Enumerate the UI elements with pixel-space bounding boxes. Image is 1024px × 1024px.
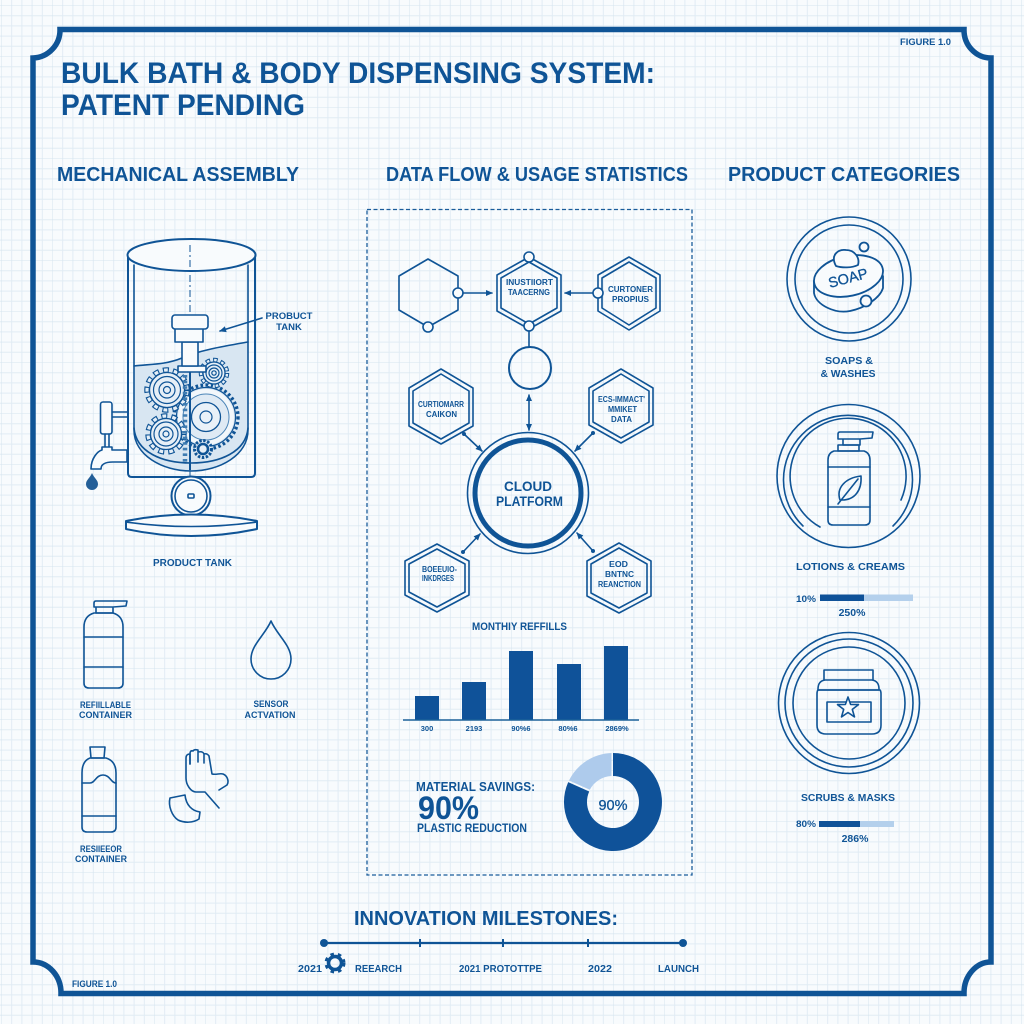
label: reservoir container: RESIIEEOR bbox=[80, 844, 122, 854]
diagonal arrows bbox=[461, 431, 595, 554]
bar chart: 90%6 bbox=[511, 724, 531, 733]
icon: refillable pump bottle bbox=[84, 601, 127, 688]
icon: lotion bottle bbox=[777, 404, 920, 548]
heading: INNOVATION MILESTONES: bbox=[354, 908, 618, 930]
figure label top: FIGURE 1.0 bbox=[900, 37, 951, 47]
tank liquid bbox=[134, 342, 248, 471]
hexagon: industry tracking: INUSTIIORT bbox=[506, 278, 553, 287]
timeline labels: 2021 PROTOTTPE bbox=[459, 964, 542, 975]
hexagon: industry tracking bbox=[497, 252, 561, 331]
gear upper right bbox=[201, 360, 227, 386]
icon: drop bbox=[251, 621, 291, 679]
cloud platform: CLOUD bbox=[504, 479, 552, 494]
bar chart: 2193 bbox=[466, 724, 482, 733]
label: reservoir container bbox=[75, 844, 127, 864]
dashed panel bbox=[367, 210, 692, 875]
stat: material savings: 90% bbox=[418, 790, 479, 826]
hexagon: bottom right: EOD bbox=[609, 560, 628, 569]
tank body bbox=[128, 255, 255, 477]
base bbox=[126, 514, 257, 536]
hexagon: customer caution bbox=[409, 369, 473, 444]
arrow bbox=[463, 292, 492, 294]
icon: soap bbox=[787, 217, 911, 341]
stat: material savings bbox=[416, 780, 535, 835]
bar chart: 300 bbox=[421, 724, 433, 733]
progress: lotions bbox=[796, 594, 913, 619]
hexagon: bottom right bbox=[587, 543, 651, 613]
timeline labels: 2022 bbox=[588, 964, 612, 975]
figure label bottom: FIGURE 1.0 bbox=[72, 979, 117, 989]
timeline labels: LAUNCH bbox=[658, 964, 699, 975]
icon: reservoir bottle bbox=[82, 747, 116, 832]
bar chart bbox=[403, 646, 639, 733]
small gear bbox=[194, 440, 212, 458]
hexagon: customer caution: CAIKON bbox=[426, 410, 457, 419]
diagram: product tank bbox=[86, 239, 257, 536]
label: sensor activation: ACTVATION bbox=[244, 710, 296, 720]
centre line bbox=[189, 245, 191, 525]
shaft bearings bbox=[183, 375, 187, 462]
hexagon: bottom right: REANCTION bbox=[598, 580, 641, 589]
progress: lotions: 250% bbox=[839, 607, 866, 619]
hexagon: customer profiles: CURTONER bbox=[608, 285, 653, 294]
label: sensor activation bbox=[244, 699, 296, 720]
label: refillable container: CONTAINER bbox=[79, 710, 132, 720]
connector bbox=[528, 331, 530, 347]
donut chart: 90% bbox=[598, 798, 628, 814]
progress: scrubs: 80% bbox=[796, 819, 817, 830]
callout: product tank bbox=[266, 311, 313, 333]
timeline bbox=[320, 939, 687, 947]
cloud platform bbox=[468, 432, 588, 554]
timeline labels: REEARCH bbox=[355, 964, 402, 975]
panel: product categories bbox=[777, 217, 920, 845]
gear upper left bbox=[147, 370, 187, 410]
hexagon: customer profiles bbox=[593, 257, 660, 330]
bar chart: 2869% bbox=[605, 724, 629, 733]
label: scrubs and masks: SCRUBS & MASKS bbox=[801, 792, 895, 804]
label: refillable container: REFIILLABLE bbox=[80, 700, 131, 710]
shaft and cap bbox=[178, 366, 206, 372]
arrow bbox=[565, 292, 593, 294]
hexagon: customer profiles: PROPIUS bbox=[612, 295, 650, 304]
bar chart: 80%6 bbox=[558, 724, 578, 733]
hexagon: bottom right: BNTNC bbox=[605, 570, 634, 579]
chart title: MONTHIY REFFILLS bbox=[472, 621, 567, 633]
label: soaps and washes bbox=[820, 355, 876, 380]
heading: product categories: PRODUCT CATEGORIES bbox=[728, 164, 960, 186]
arrow bbox=[528, 395, 530, 430]
network diagram bbox=[399, 252, 660, 613]
hexagon: eco-impact data bbox=[589, 369, 653, 443]
panel: data flow and usage statistics bbox=[367, 210, 692, 875]
heading: data flow: DATA FLOW & USAGE STATISTICS bbox=[386, 164, 688, 186]
gear icon bbox=[326, 954, 344, 972]
timeline labels: 2021 bbox=[298, 964, 322, 975]
callout arrow bbox=[220, 318, 262, 331]
label: soaps and washes: & WASHES bbox=[820, 368, 876, 380]
progress: scrubs bbox=[796, 819, 894, 845]
callout: product tank: PROBUCT bbox=[266, 311, 313, 322]
label: refillable container bbox=[79, 700, 132, 720]
icon: hand sensor bbox=[169, 750, 228, 822]
heading: mechanical assembly: MECHANICAL ASSEMBLY bbox=[57, 164, 300, 186]
large chain gear bbox=[174, 385, 238, 449]
title: PATENT PENDING bbox=[61, 89, 305, 122]
label: lotions and creams: LOTIONS & CREAMS bbox=[796, 561, 905, 573]
icon: soap: SOAP bbox=[827, 266, 870, 292]
hexagon: eco-impact data: MMIKET bbox=[608, 405, 637, 414]
label: reservoir container: CONTAINER bbox=[75, 854, 127, 864]
hexagon: bottom left: INKDRGES bbox=[422, 574, 454, 583]
hexagon: eco-impact data: DATA bbox=[611, 415, 632, 424]
title: BULK BATH & BODY DISPENSING SYSTEM: bbox=[61, 57, 655, 90]
wheel bbox=[172, 476, 210, 516]
node circle bbox=[509, 347, 551, 389]
stat: material savings: MATERIAL SAVINGS: bbox=[416, 780, 535, 794]
donut chart bbox=[564, 753, 662, 851]
callout: product tank: TANK bbox=[276, 322, 302, 333]
panel: innovation milestones bbox=[298, 908, 699, 975]
gear lower left bbox=[148, 416, 184, 452]
drop bbox=[86, 473, 98, 490]
progress: scrubs: 286% bbox=[842, 833, 869, 845]
hexagon: customer caution: CURTIOMARR bbox=[418, 400, 464, 409]
cloud platform: PLATFORM bbox=[496, 494, 563, 509]
caption: product tank: PRODUCT TANK bbox=[153, 557, 232, 569]
title bbox=[61, 57, 655, 122]
hexagon: bottom left: BOEEUIO- bbox=[422, 565, 457, 574]
gears bbox=[147, 360, 238, 462]
stat: material savings: PLASTIC REDUCTION bbox=[417, 823, 527, 835]
hexagon: bottom left bbox=[405, 544, 469, 612]
timeline labels bbox=[298, 964, 699, 975]
label: sensor activation: SENSOR bbox=[254, 699, 289, 709]
hexagon: eco-impact data: ECS-IMMACT' bbox=[598, 395, 645, 404]
panel: mechanical assembly bbox=[75, 239, 313, 864]
label: soaps and washes: SOAPS & bbox=[825, 355, 873, 367]
progress: lotions: 10% bbox=[796, 594, 817, 605]
icon: scrub jar bbox=[778, 632, 920, 774]
hexagon: blank bbox=[399, 259, 463, 332]
tap bbox=[112, 412, 127, 417]
hexagon: industry tracking: TAACERNG bbox=[508, 288, 550, 297]
